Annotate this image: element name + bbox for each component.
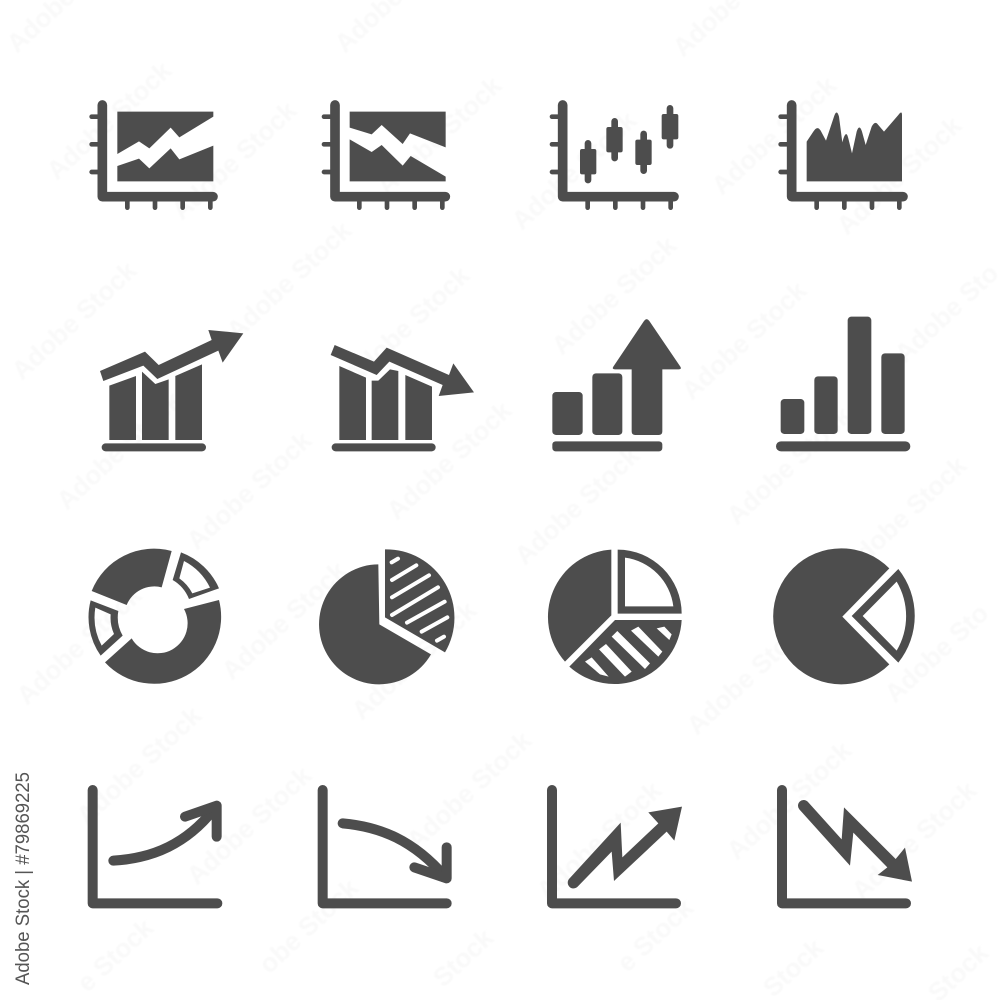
bars	[109, 364, 202, 440]
jagged area	[807, 112, 902, 181]
axis lines	[335, 105, 445, 197]
icon: bars with falling arrow	[331, 345, 474, 451]
candlesticks	[580, 105, 678, 183]
watermark pattern: obe Stock	[253, 872, 364, 979]
axes	[323, 790, 447, 903]
solid slice	[548, 550, 611, 662]
watermark pattern: Adobe Stock	[11, 580, 148, 711]
hatched slice	[569, 620, 682, 684]
hatch stripes	[585, 627, 672, 677]
watermark pattern: Adobe Stock	[181, 425, 318, 556]
watermark pattern: Stock	[427, 922, 499, 993]
axes	[552, 790, 676, 903]
watermark pattern: Adobe Stock	[41, 55, 178, 186]
upper area	[117, 112, 213, 154]
stock id side caption: Adobe Stock | #79869225	[13, 772, 34, 985]
rising arrow	[100, 330, 243, 381]
base line	[332, 443, 436, 451]
outlined wedge	[852, 569, 915, 663]
watermark pattern: Adobe Stock	[216, 555, 353, 686]
watermark pattern: Adobe Stock	[546, 230, 683, 361]
outlined slice	[618, 550, 682, 614]
icon: area chart with rising band	[92, 105, 213, 208]
axes	[782, 790, 906, 903]
solid segment top	[92, 549, 172, 605]
watermark pattern: e Stock	[611, 892, 699, 977]
icon: pie chart with outlined wedge	[773, 548, 915, 684]
axes with ticks	[781, 105, 903, 208]
axes with ticks	[552, 105, 674, 208]
icon: bars with rising arrow	[100, 330, 243, 451]
watermark pattern: Adobe Stock	[721, 400, 858, 531]
upper area	[350, 112, 446, 147]
bar one	[552, 392, 583, 435]
watermark pattern: Adobe Stock	[339, 260, 476, 391]
axes with ticks	[92, 105, 213, 208]
watermark pattern: Adobe Sto	[879, 598, 994, 708]
watermark pattern: e Stock	[71, 912, 159, 997]
base line	[776, 441, 910, 451]
main slice	[319, 564, 431, 684]
watermark pattern: Adobe Stock	[506, 105, 643, 236]
lower area	[350, 139, 446, 181]
axes	[93, 790, 217, 903]
icon: rising bars with up arrow	[552, 319, 681, 451]
bar two	[592, 373, 622, 435]
hatch lines	[392, 559, 447, 641]
arrow head	[185, 806, 217, 837]
watermark pattern: Adobe Stock	[676, 275, 813, 406]
icon: curved rising arrow chart	[93, 790, 217, 903]
zigzag arrow	[798, 800, 912, 882]
watermark pattern: Adobe Stock	[681, 610, 818, 741]
watermark pattern: Adobe Stock	[836, 450, 973, 581]
icon: candlestick chart	[552, 105, 678, 208]
falling arrow	[331, 345, 474, 396]
icon: donut chart	[89, 549, 221, 684]
base line	[552, 441, 662, 451]
solid segment bottom	[105, 600, 221, 684]
watermark pattern: Adobe Stock	[721, 735, 858, 866]
bars	[339, 366, 432, 440]
outlined segment right	[173, 552, 219, 599]
watermark pattern: Adobe Stock	[51, 385, 188, 516]
watermark pattern: Adobe Stock	[71, 700, 208, 831]
axes with ticks	[324, 105, 445, 208]
lower area	[117, 146, 213, 181]
watermark pattern: Adobe Stock	[346, 595, 483, 726]
bars	[781, 317, 905, 434]
main slice	[773, 548, 889, 684]
outlined segment left	[89, 600, 123, 656]
watermark pattern: Adobe Stock	[846, 775, 983, 906]
icon: pie chart with hatched slice	[319, 549, 454, 684]
icon: pie chart three slices	[548, 550, 682, 684]
axis lines	[102, 105, 213, 197]
icon: area chart with falling band	[324, 105, 446, 208]
curved rising line	[113, 810, 213, 861]
hatched slice	[385, 549, 454, 652]
axis lines	[563, 105, 674, 197]
watermark pattern: Adobe Stock	[509, 440, 646, 571]
base line	[102, 443, 206, 451]
icon: bar chart	[776, 317, 910, 451]
icon: jagged area chart	[781, 105, 903, 208]
watermark pattern: Adobe Stock	[831, 110, 968, 241]
zigzag arrow	[568, 807, 682, 888]
watermark pattern: Adobe Stock	[706, 70, 843, 201]
icon: curved falling arrow chart	[323, 790, 447, 903]
axis lines	[792, 105, 903, 197]
watermark pattern: Adobe Stock	[166, 95, 303, 226]
curved falling line	[343, 823, 445, 877]
watermark pattern: Adobe Stock	[531, 775, 668, 906]
watermark pattern: Adobe Stock	[371, 70, 508, 201]
watermark pattern: Adobe Stock	[381, 395, 518, 526]
arrow head	[414, 847, 447, 878]
icon: zigzag rising arrow chart	[552, 790, 682, 903]
watermark pattern: Adobe Stock	[181, 760, 318, 891]
icon: zigzag falling arrow chart	[782, 790, 912, 903]
watermark pattern: Adobe Stock	[401, 725, 538, 856]
watermark pattern: Adobe Stock	[221, 215, 358, 346]
up arrow	[613, 319, 681, 435]
watermark pattern: Adobe Stock	[6, 255, 143, 386]
